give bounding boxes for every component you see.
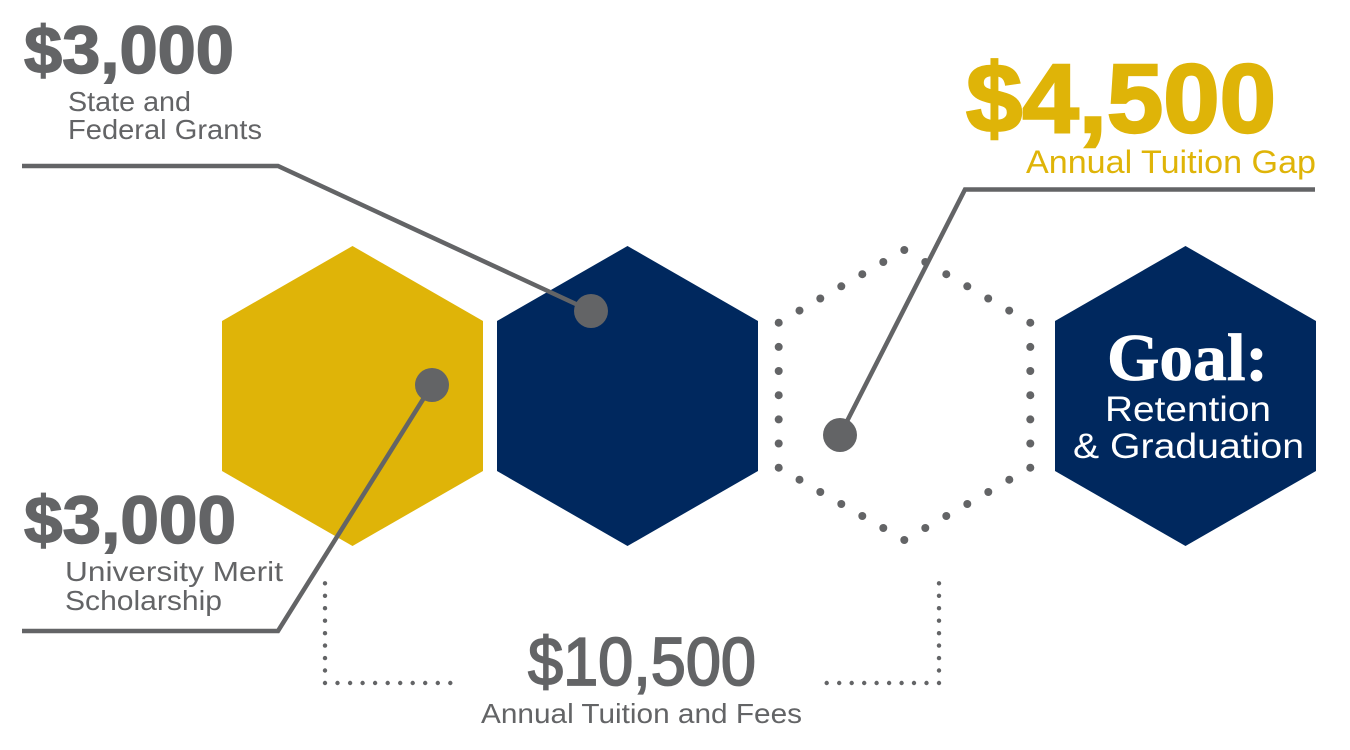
goal text: & Graduation <box>1073 427 1304 466</box>
label: state and federal grants: State and <box>68 86 191 117</box>
label: annual tuition gap: $4,500 <box>966 44 1276 153</box>
dotted bracket: right <box>824 581 941 685</box>
label: annual tuition and fees: Annual Tuition and Fees <box>481 698 802 729</box>
label: university merit scholarship: University Merit <box>65 556 283 587</box>
callout line: tuition gap <box>823 190 1315 452</box>
label: annual tuition and fees: $10,500 <box>528 624 756 700</box>
label: state and federal grants: Federal Grants <box>68 114 262 145</box>
goal text: Goal: <box>1107 321 1268 395</box>
goal text: Retention <box>1105 390 1271 429</box>
callout line: university merit scholarship <box>22 368 449 631</box>
label: state and federal grants: $3,000 <box>24 13 234 88</box>
label: annual tuition gap: Annual Tuition Gap <box>1026 144 1316 180</box>
dotted bracket: left <box>323 581 452 685</box>
label: state and federal grants <box>24 13 262 145</box>
label: university merit scholarship: $3,000 <box>24 483 236 558</box>
hexagon: state and federal grants <box>497 246 758 546</box>
hexagon: dotted tuition gap <box>775 246 1034 544</box>
label: annual tuition gap <box>966 44 1316 180</box>
hexagon: university merit scholarship <box>222 246 483 546</box>
hexagon: goal <box>1055 246 1316 546</box>
label: university merit scholarship <box>24 483 283 616</box>
callout line: state and federal grants <box>22 166 608 328</box>
goal text <box>1073 321 1304 466</box>
label: university merit scholarship: Scholarship <box>65 585 222 616</box>
label: annual tuition and fees <box>481 624 802 729</box>
